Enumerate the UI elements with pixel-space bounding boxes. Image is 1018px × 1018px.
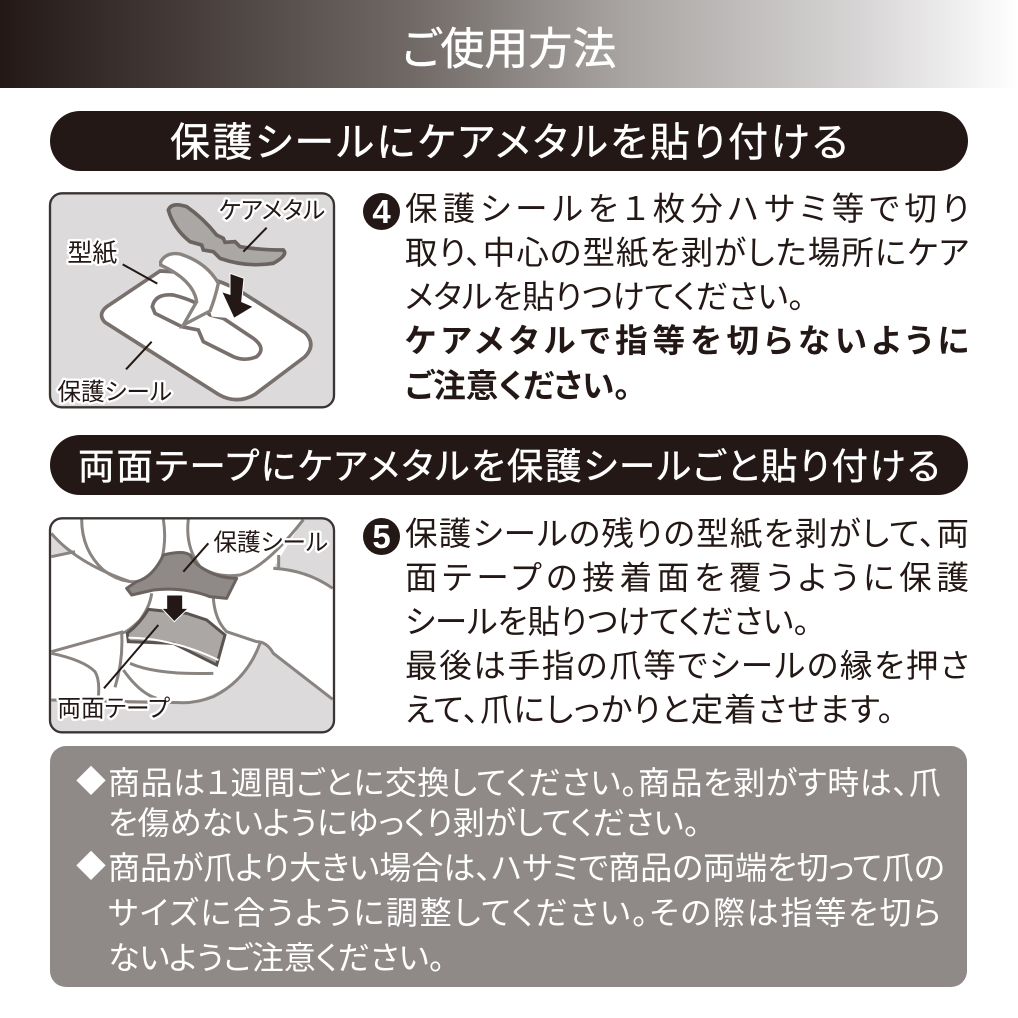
heading: step 4 banner: 保護シールにケアメタルを貼り付ける [170,121,848,165]
step 4 text [405,191,969,404]
panel: notes: 商品は１週間ごとに交換してください。商品を剥がす時は、爪 [108,765,941,801]
step 4 number: 4 [372,193,391,230]
heading: step 5 banner: 両面テープにケアメタルを保護シールごと貼り付ける [78,446,940,487]
step 5 number: 5 [372,518,391,555]
illustration: step 4: 保護シール [57,379,172,406]
illustration: step 5: 保護シール [213,530,328,557]
panel: notes: ◆ [76,851,106,884]
step 5 text: 保護シールの残りの型紙を剥がして、両 [405,516,969,552]
panel: notes: 商品が爪より大きい場合は、ハサミで商品の両端を切って爪の [108,850,945,886]
step 4 text: メタルを貼りつけてください。 [405,279,804,315]
step 4 text: ケアメタルで指等を切らないように [405,323,969,359]
step 5 text: えて、爪にしっかりと定着させます。 [405,692,895,728]
step 5 text [405,516,969,728]
step 4 text: 取り、中心の型紙を剥がした場所にケア [405,235,969,271]
heading: step 5 banner [50,435,968,495]
step 4 number [363,193,400,230]
panel: notes [50,746,967,987]
step 5 text: 最後は手指の爪等でシールの縁を押さ [405,648,969,684]
step 5 number [363,518,400,555]
step 5 text: 面テープの接着面を覆うように保護 [405,560,969,596]
panel: notes: サイズに合うように調整してください。その際は指等を切ら [108,895,941,931]
panel: notes: を傷めないようにゆっくり剥がしてください。 [108,805,700,841]
panel: notes: ないようご注意ください。 [108,940,445,976]
step 4 text: ご注意ください。 [405,368,630,404]
illustration: step 4: 型紙 [67,240,117,268]
step 5 text: シールを貼りつけてください。 [405,604,810,640]
title bar [0,0,1018,88]
illustration: step 4: ケアメタル [219,198,325,224]
title bar: ご使用方法 [402,25,616,74]
panel: notes: ◆ [76,766,106,799]
heading: step 4 banner [50,111,968,171]
illustration: step 5: 両面テープ [57,696,171,723]
step 4 text: 保護シールを１枚分ハサミ等で切り [405,191,969,227]
